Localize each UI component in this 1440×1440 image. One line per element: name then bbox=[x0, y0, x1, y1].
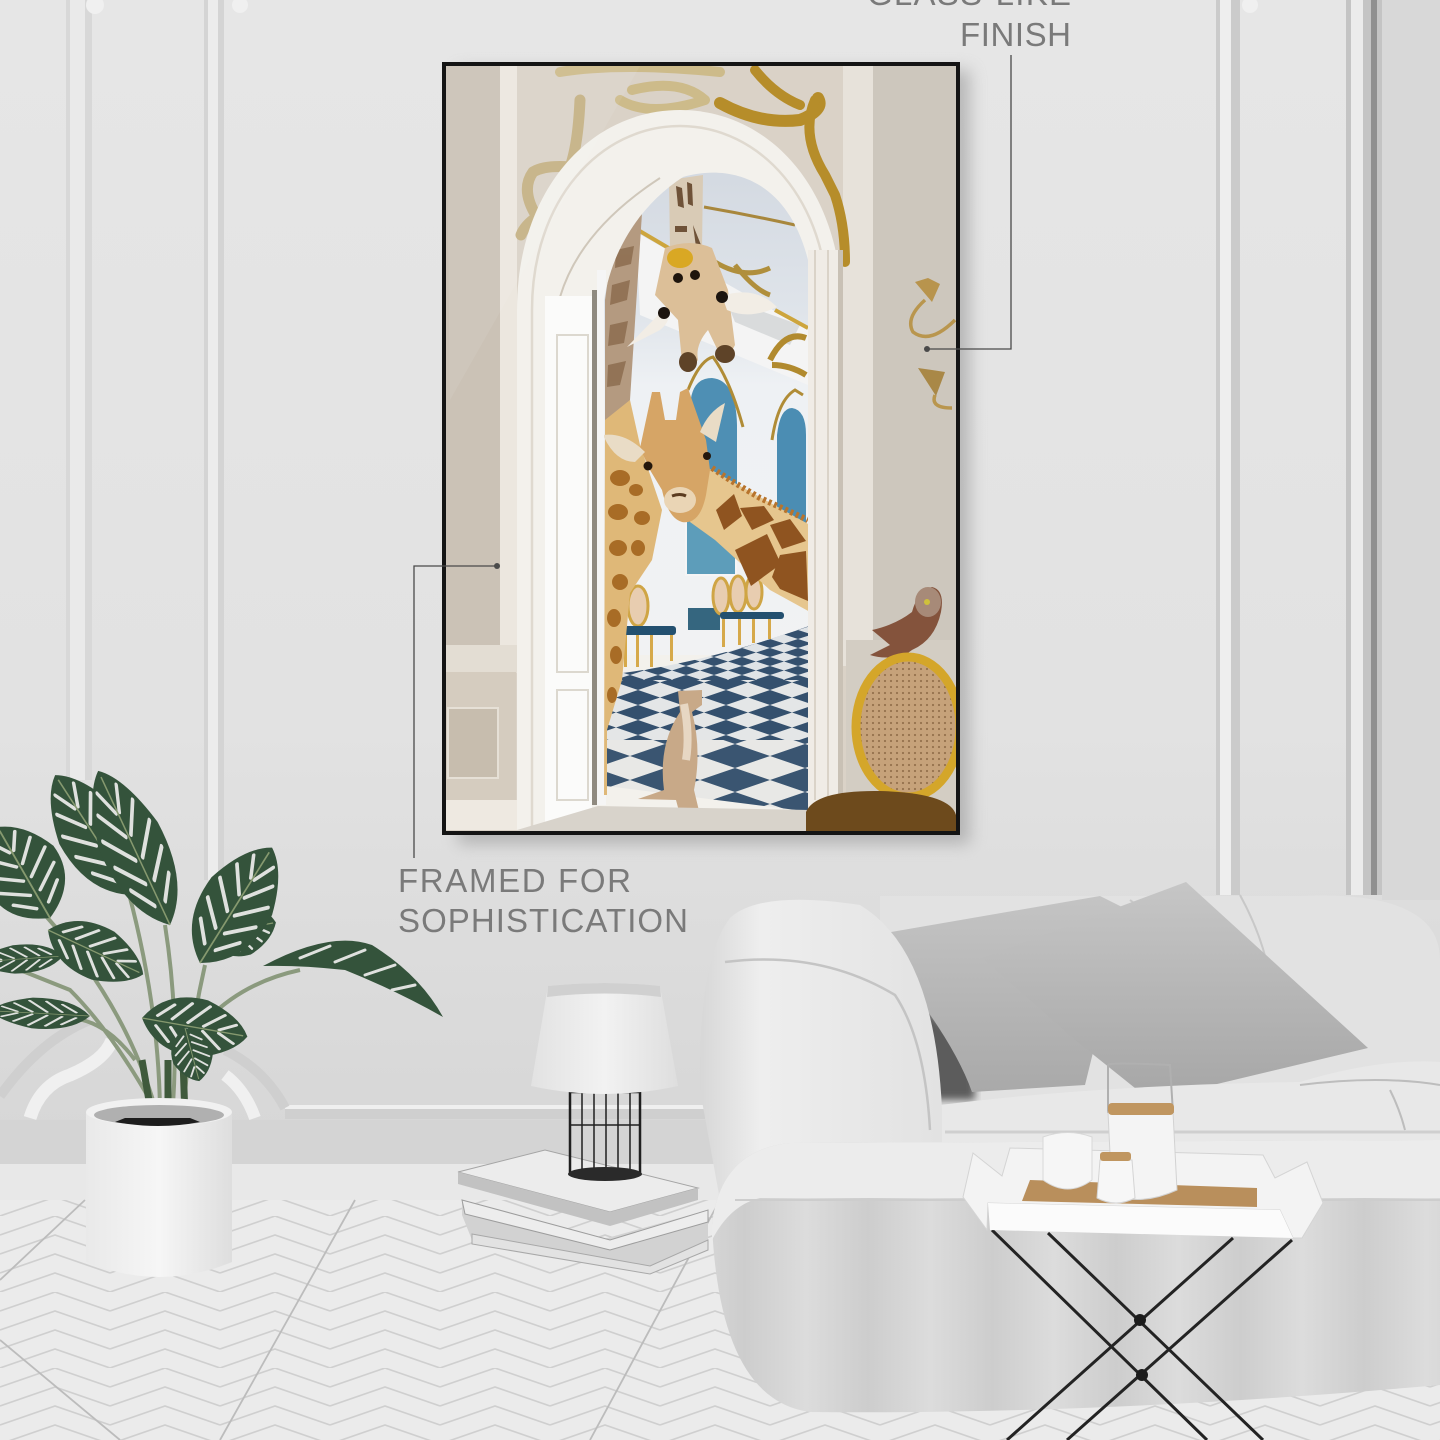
glass glare bbox=[446, 66, 640, 400]
owl bbox=[870, 587, 942, 658]
frame bbox=[442, 62, 960, 835]
monstera plant bbox=[0, 756, 443, 1277]
sconces bbox=[911, 278, 955, 408]
lamp and books bbox=[458, 983, 708, 1274]
shadow behind arm bbox=[915, 1000, 975, 1100]
rear giraffe neck bbox=[605, 213, 642, 435]
wall mouldings bbox=[0, 0, 1440, 1118]
callout: glass-like finish: FINISH bbox=[960, 16, 1071, 53]
sofa arm bbox=[700, 900, 942, 1200]
right arch pillar bbox=[814, 250, 843, 800]
sofa bbox=[700, 882, 1440, 1412]
hanging giraffe bbox=[627, 175, 777, 372]
baseboard bbox=[0, 1120, 720, 1202]
meerkat bbox=[638, 690, 702, 815]
front giraffe body bbox=[604, 400, 662, 795]
side wall panels bbox=[446, 66, 500, 646]
callout: framed for sophistication: SOPHISTICATION bbox=[398, 902, 688, 939]
white arch bbox=[517, 110, 842, 830]
seat cushions bbox=[940, 1061, 1440, 1200]
pivots bbox=[1134, 1314, 1148, 1381]
painting bbox=[446, 66, 960, 835]
pillows bbox=[868, 896, 1128, 1092]
herringbone floor bbox=[0, 1200, 1440, 1440]
giraffe neck right bbox=[690, 468, 810, 612]
front giraffe head bbox=[603, 388, 725, 522]
stems bbox=[20, 890, 300, 1118]
ceramic jars bbox=[1043, 1064, 1177, 1203]
lamp shade bbox=[531, 983, 678, 1094]
framed artwork bbox=[442, 62, 970, 844]
side table with tray bbox=[963, 1064, 1323, 1440]
checker floor bbox=[622, 626, 808, 680]
callout: framed for sophistication bbox=[398, 563, 688, 939]
pot bbox=[86, 1098, 232, 1277]
leaf cluster bbox=[26, 756, 162, 914]
blue wall panels bbox=[691, 378, 737, 484]
table legs bbox=[992, 1230, 1292, 1440]
floor stone bbox=[518, 806, 807, 830]
gold ornament bbox=[521, 67, 845, 262]
chairs bbox=[622, 575, 784, 667]
lamp cage bbox=[568, 1092, 642, 1181]
callout: glass-like finish bbox=[867, 0, 1071, 352]
cornice and ceiling bbox=[636, 232, 808, 385]
front seat bbox=[712, 1140, 1440, 1412]
tray bbox=[963, 1148, 1323, 1238]
long right leaf bbox=[263, 941, 443, 1017]
frame shadow bbox=[458, 70, 970, 844]
sofa back bbox=[880, 896, 1440, 1150]
hall interior bbox=[600, 165, 815, 815]
lower wall bbox=[688, 608, 720, 630]
door bbox=[545, 270, 606, 826]
cane chair bbox=[806, 657, 960, 831]
callout: framed for sophistication: FRAMED FOR bbox=[398, 862, 631, 899]
